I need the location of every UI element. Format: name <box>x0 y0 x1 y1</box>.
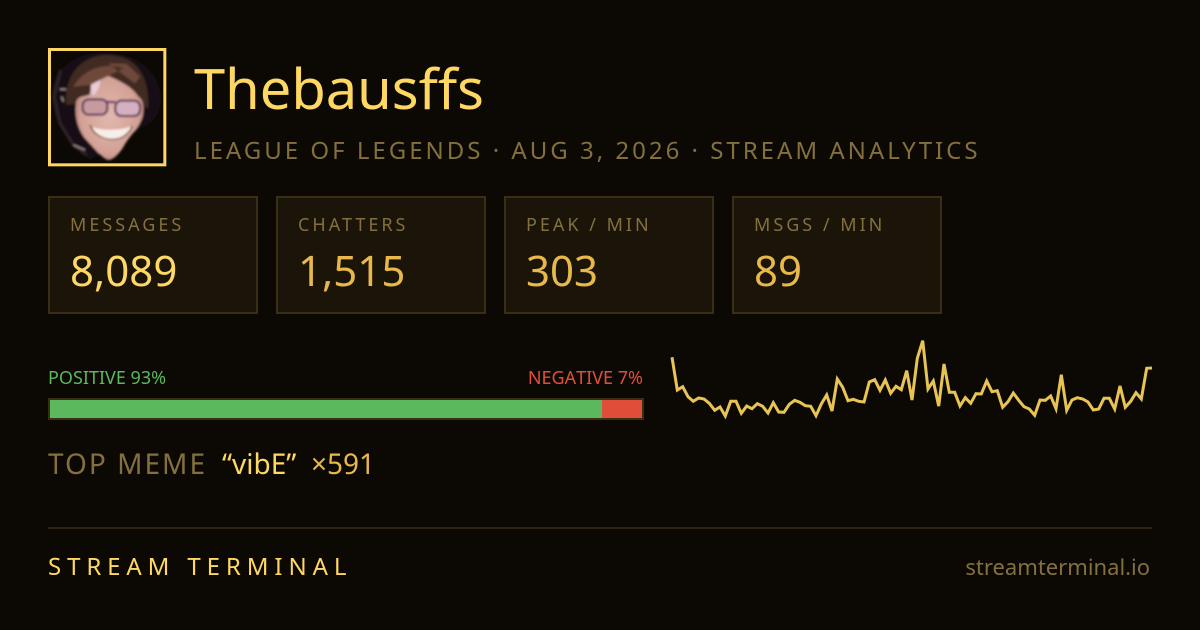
stat card: messages: 8,089 <box>70 242 177 299</box>
stat card: chatters: CHATTERS <box>298 213 408 237</box>
avatar <box>48 48 166 166</box>
footer brand: STREAM TERMINAL <box>48 550 352 583</box>
stat card: chatters: 1,515 <box>298 242 405 299</box>
stat card: peak per minute: PEAK / MIN <box>526 213 652 237</box>
stat card: messages per minute: MSGS / MIN <box>754 213 885 237</box>
negative label: NEGATIVE 7% <box>528 366 643 390</box>
stat card: chatters <box>276 196 486 314</box>
top meme row <box>48 445 375 483</box>
stat card: messages <box>48 196 258 314</box>
top meme row: ×591 <box>311 445 375 483</box>
top meme row: “vibE” <box>222 445 296 483</box>
stat card: messages per minute <box>732 196 942 314</box>
stat card: peak per minute: 303 <box>526 242 598 299</box>
positive label: POSITIVE 93% <box>48 366 166 390</box>
stat card: messages: MESSAGES <box>70 213 184 237</box>
top meme row: TOP MEME <box>48 445 207 483</box>
footer divider <box>48 527 1152 529</box>
stat card: messages per minute: 89 <box>754 242 802 299</box>
footer url: streamterminal.io <box>965 552 1150 582</box>
stat card: peak per minute <box>504 196 714 314</box>
title: Thebausffs <box>194 50 484 126</box>
sentiment bar <box>48 398 644 420</box>
subtitle: LEAGUE OF LEGENDS · AUG 3, 2026 · STREAM ANALYTICS <box>194 134 981 167</box>
